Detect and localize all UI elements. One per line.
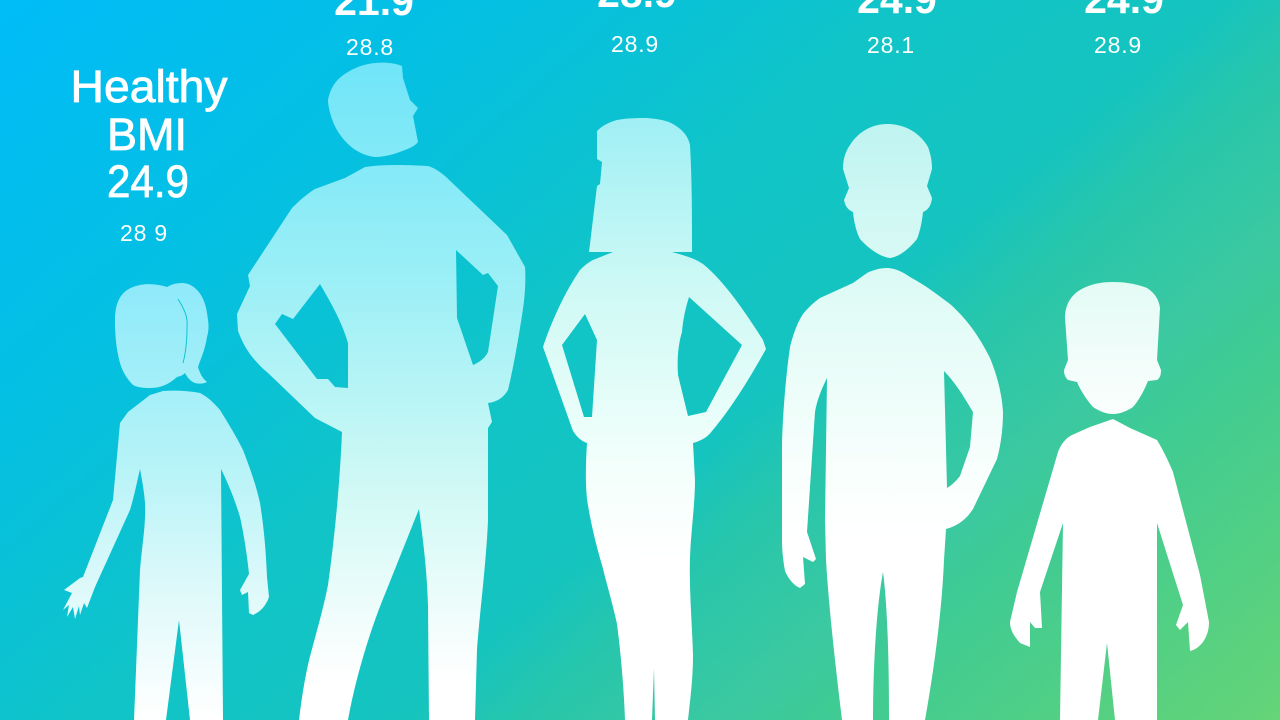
heading: Healthy BMI 24.9: 24.9	[107, 156, 189, 207]
heading: Healthy BMI 24.9: 28 9	[120, 220, 168, 246]
silhouette: boy	[1010, 282, 1209, 720]
value column 2: 28.8	[346, 34, 394, 60]
value column 5: 28.9	[1094, 32, 1142, 58]
silhouette: girl with ponytail	[63, 283, 269, 720]
value column 4	[857, 0, 937, 58]
heading: Healthy BMI 24.9	[70, 61, 228, 246]
silhouette: tall man in profile, hands on hips	[237, 63, 525, 720]
silhouette: woman with bob hair, hands on hips	[543, 118, 766, 720]
heading: Healthy BMI 24.9: Healthy	[70, 61, 228, 112]
value column 2	[334, 0, 414, 60]
value column 5	[1084, 0, 1164, 58]
heading: Healthy BMI 24.9: BMI	[107, 109, 187, 160]
silhouette: man with short hair, hand on hip	[782, 124, 1003, 720]
value column 3: 28.9	[611, 31, 659, 57]
value column 4: 28.1	[867, 32, 915, 58]
value column 3	[597, 0, 677, 57]
